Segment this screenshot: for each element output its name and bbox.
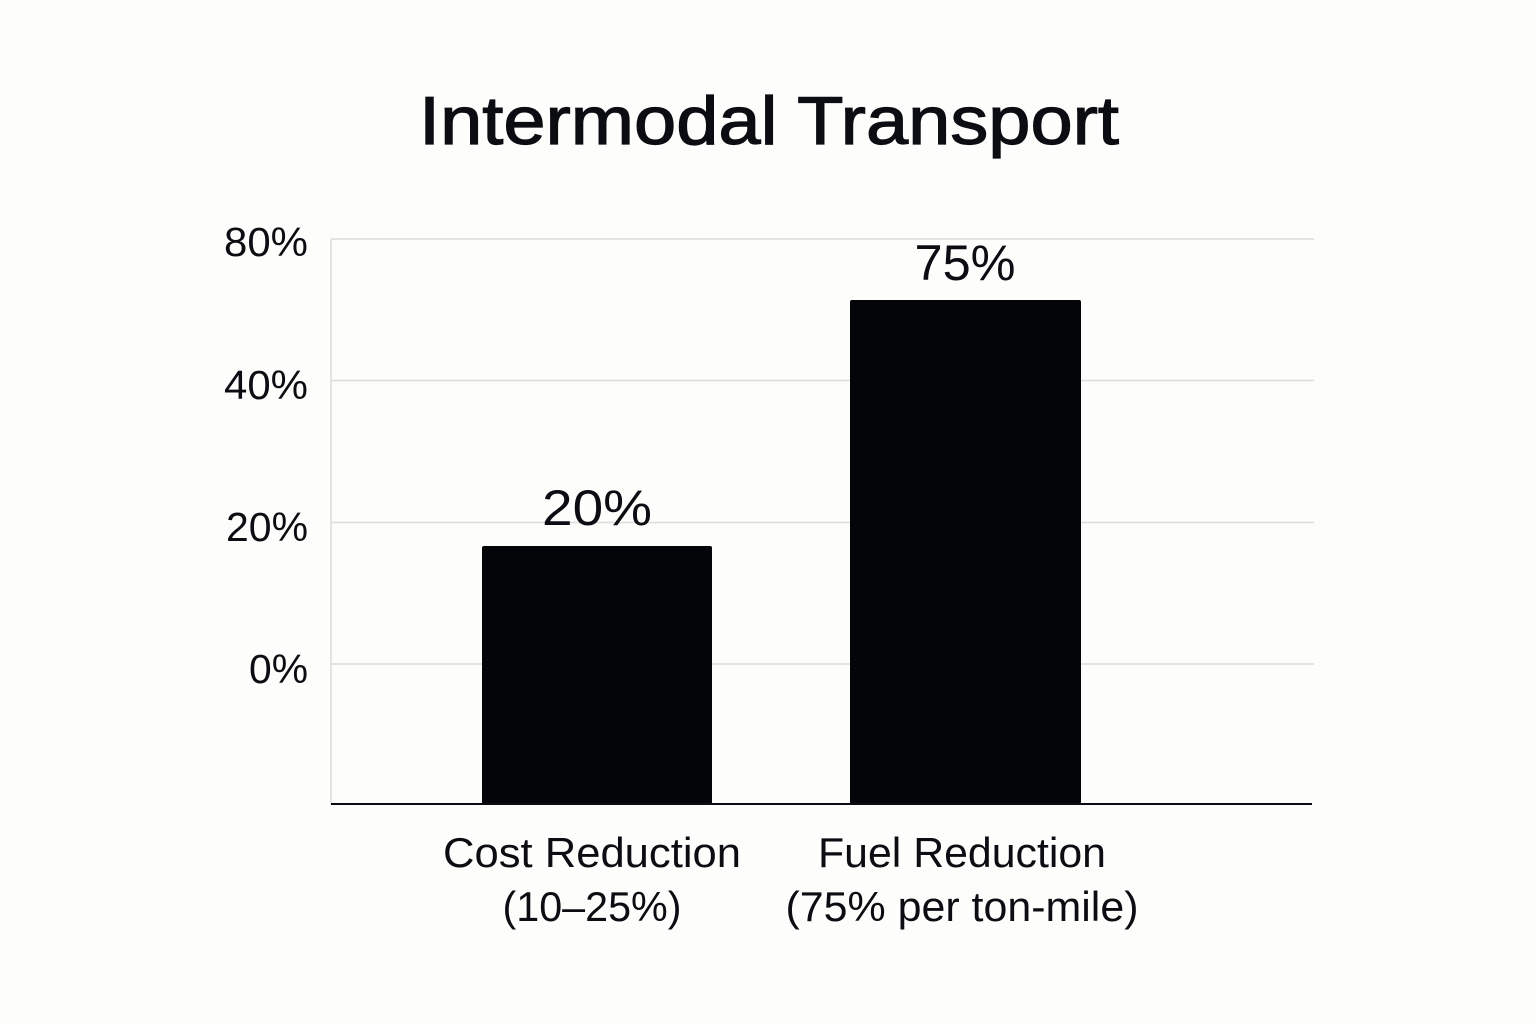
- category label: fuel reduction: Fuel Reduction: [818, 829, 1106, 876]
- value label: 20%: 20%: [542, 480, 652, 536]
- category label: cost reduction: Cost Reduction: [443, 829, 741, 876]
- y-axis labels: 0%: [249, 646, 308, 692]
- category label: cost reduction: (10–25%): [502, 883, 682, 930]
- category label: fuel reduction: [786, 829, 1138, 930]
- bar: fuel reduction: [850, 300, 1081, 804]
- y-axis labels: 40%: [224, 362, 308, 408]
- category label: cost reduction: [443, 829, 741, 930]
- y-axis labels: [224, 219, 308, 692]
- value label: 75%: 75%: [914, 235, 1016, 291]
- y-axis labels: 20%: [226, 504, 308, 550]
- category label: fuel reduction: (75% per ton-mile): [786, 883, 1138, 930]
- bar: cost reduction: [482, 546, 712, 804]
- y-axis labels: 80%: [224, 219, 308, 265]
- x axis: [331, 803, 1312, 805]
- bar chart: [224, 219, 1314, 930]
- title: Intermodal Transport: [419, 83, 1119, 159]
